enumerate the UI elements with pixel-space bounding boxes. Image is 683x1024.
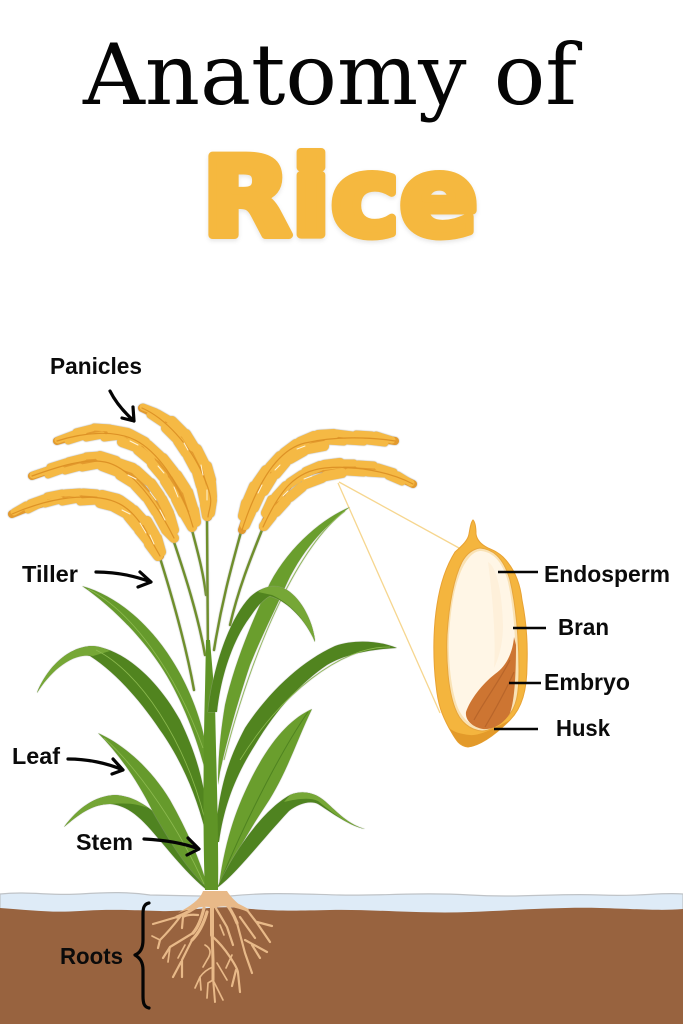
- endosperm highlight: [488, 562, 503, 668]
- husk shading: [449, 720, 510, 747]
- tillers: [160, 518, 262, 690]
- title: Rice: Rice: [202, 134, 478, 261]
- panicle 5: [242, 433, 395, 530]
- plant leaves and stem: [37, 507, 397, 890]
- arrow: Stem: [144, 838, 199, 855]
- leaf: lower right drooping: [217, 792, 365, 888]
- embryo shading: [474, 660, 514, 727]
- label: Bran: Bran: [558, 614, 609, 640]
- arrow: Leaf: [68, 759, 123, 774]
- leaf: right long: [215, 642, 397, 842]
- label: Embryo: Embryo: [544, 669, 630, 695]
- stem: [204, 640, 218, 890]
- husk: [434, 520, 527, 747]
- panicle 6: [263, 463, 413, 527]
- panicle 4: [142, 407, 212, 517]
- label: Leaf: Leaf: [12, 743, 60, 769]
- leaf: lower left straight: [98, 733, 208, 888]
- bran: [447, 548, 519, 731]
- leader lines: [494, 572, 546, 729]
- leaf: central tall: [218, 507, 350, 785]
- arrow: Panicles: [110, 391, 134, 421]
- label: Panicles: Panicles: [50, 353, 142, 379]
- panicle 1: [12, 492, 161, 556]
- endosperm: [449, 551, 515, 728]
- leaf: upper left: [82, 586, 206, 770]
- leaf: lower left drooping: [64, 795, 207, 890]
- panicle 2: [32, 455, 174, 538]
- brace: Roots: [135, 903, 149, 1008]
- label: Tiller: Tiller: [22, 561, 78, 587]
- title: Anatomy of: Anatomy of: [82, 26, 583, 124]
- label: Roots: Roots: [60, 943, 123, 969]
- yellow zoom lines: [338, 482, 459, 713]
- water layer: [0, 893, 683, 915]
- label: Husk: Husk: [556, 715, 610, 741]
- leaf: drooping upper right: [208, 586, 315, 712]
- label: Endosperm: Endosperm: [544, 561, 670, 587]
- embryo: [466, 637, 516, 729]
- leaf: left drooping: [37, 646, 209, 835]
- label: Stem: Stem: [76, 829, 133, 855]
- rice grain cross-section: [434, 520, 527, 747]
- roots: [152, 891, 272, 1002]
- soil: [0, 907, 683, 1024]
- panicle 3: [57, 427, 196, 527]
- leaf: right small: [219, 709, 312, 885]
- arrow: Tiller: [96, 572, 151, 587]
